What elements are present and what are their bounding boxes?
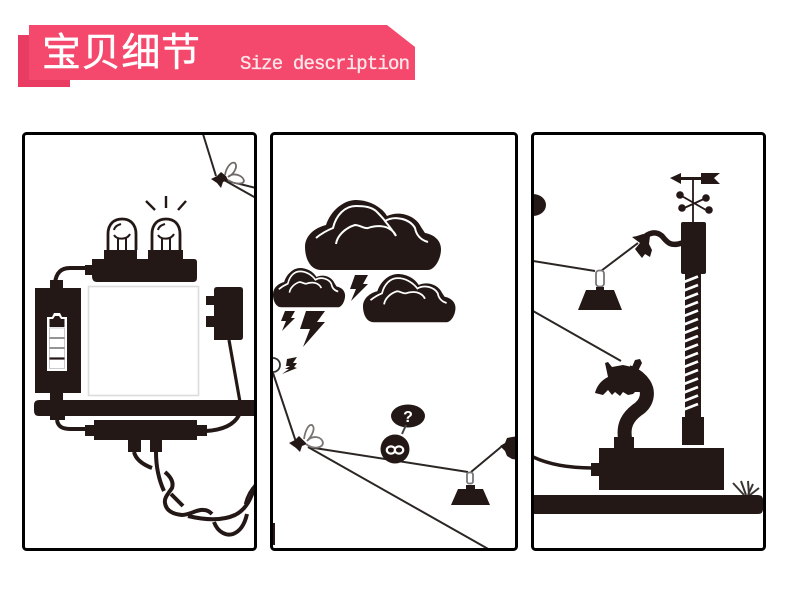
wire from plug to shelf: [229, 340, 240, 402]
speech bubble: [391, 404, 425, 434]
upper pole box: [681, 222, 706, 274]
speech bubble: ?: [403, 409, 413, 426]
icon: light bulbs: [108, 219, 180, 250]
icon: weather vane: [670, 173, 720, 222]
lower pole box: [682, 417, 704, 445]
heading: 宝贝细节: 宝贝细节: [42, 32, 200, 75]
icon: hook and hand: [595, 359, 647, 438]
circuit block on top: [85, 250, 197, 282]
subheading: Size description: Size description: [240, 53, 410, 75]
icon: hand and neck: [632, 233, 682, 258]
header banner: [18, 25, 415, 87]
icon: lightning bolts: [281, 275, 368, 374]
battery box: [35, 280, 81, 400]
edge ellipse: [534, 194, 546, 216]
panel: circuit with bulbs: [24, 134, 256, 550]
strings: [273, 373, 501, 550]
icon: battery level: [47, 313, 67, 371]
icon: right cloud: [363, 274, 455, 322]
central blank panel: [88, 286, 198, 396]
strings: [533, 243, 638, 361]
icon: small left cloud: [273, 268, 345, 307]
ground bar: [533, 495, 763, 514]
icon: light rays: [146, 196, 186, 210]
wire to battery: [55, 268, 86, 283]
icon: fly with strings: [203, 134, 256, 198]
lower connector: [50, 415, 239, 452]
icon: hanging weight: [451, 472, 490, 505]
panel: storm clouds and creature: [266, 134, 518, 550]
icon: hand at edge: [500, 436, 515, 460]
icon: grass: [733, 481, 759, 495]
spiral pole: [684, 273, 701, 418]
icon: round creature: [380, 434, 410, 464]
icon: hanging weight: [578, 270, 622, 310]
wire: [533, 457, 592, 468]
icon: fly: [289, 425, 323, 452]
shelf bar: [34, 400, 256, 416]
twisted cables: [134, 452, 256, 535]
machine block: [591, 437, 724, 490]
right plug box: [206, 287, 243, 340]
icon: large cloud: [305, 200, 441, 270]
edge fragment: [273, 523, 275, 545]
panel: weather vane machine: [520, 134, 764, 550]
icon: ring at edge: [273, 357, 281, 373]
